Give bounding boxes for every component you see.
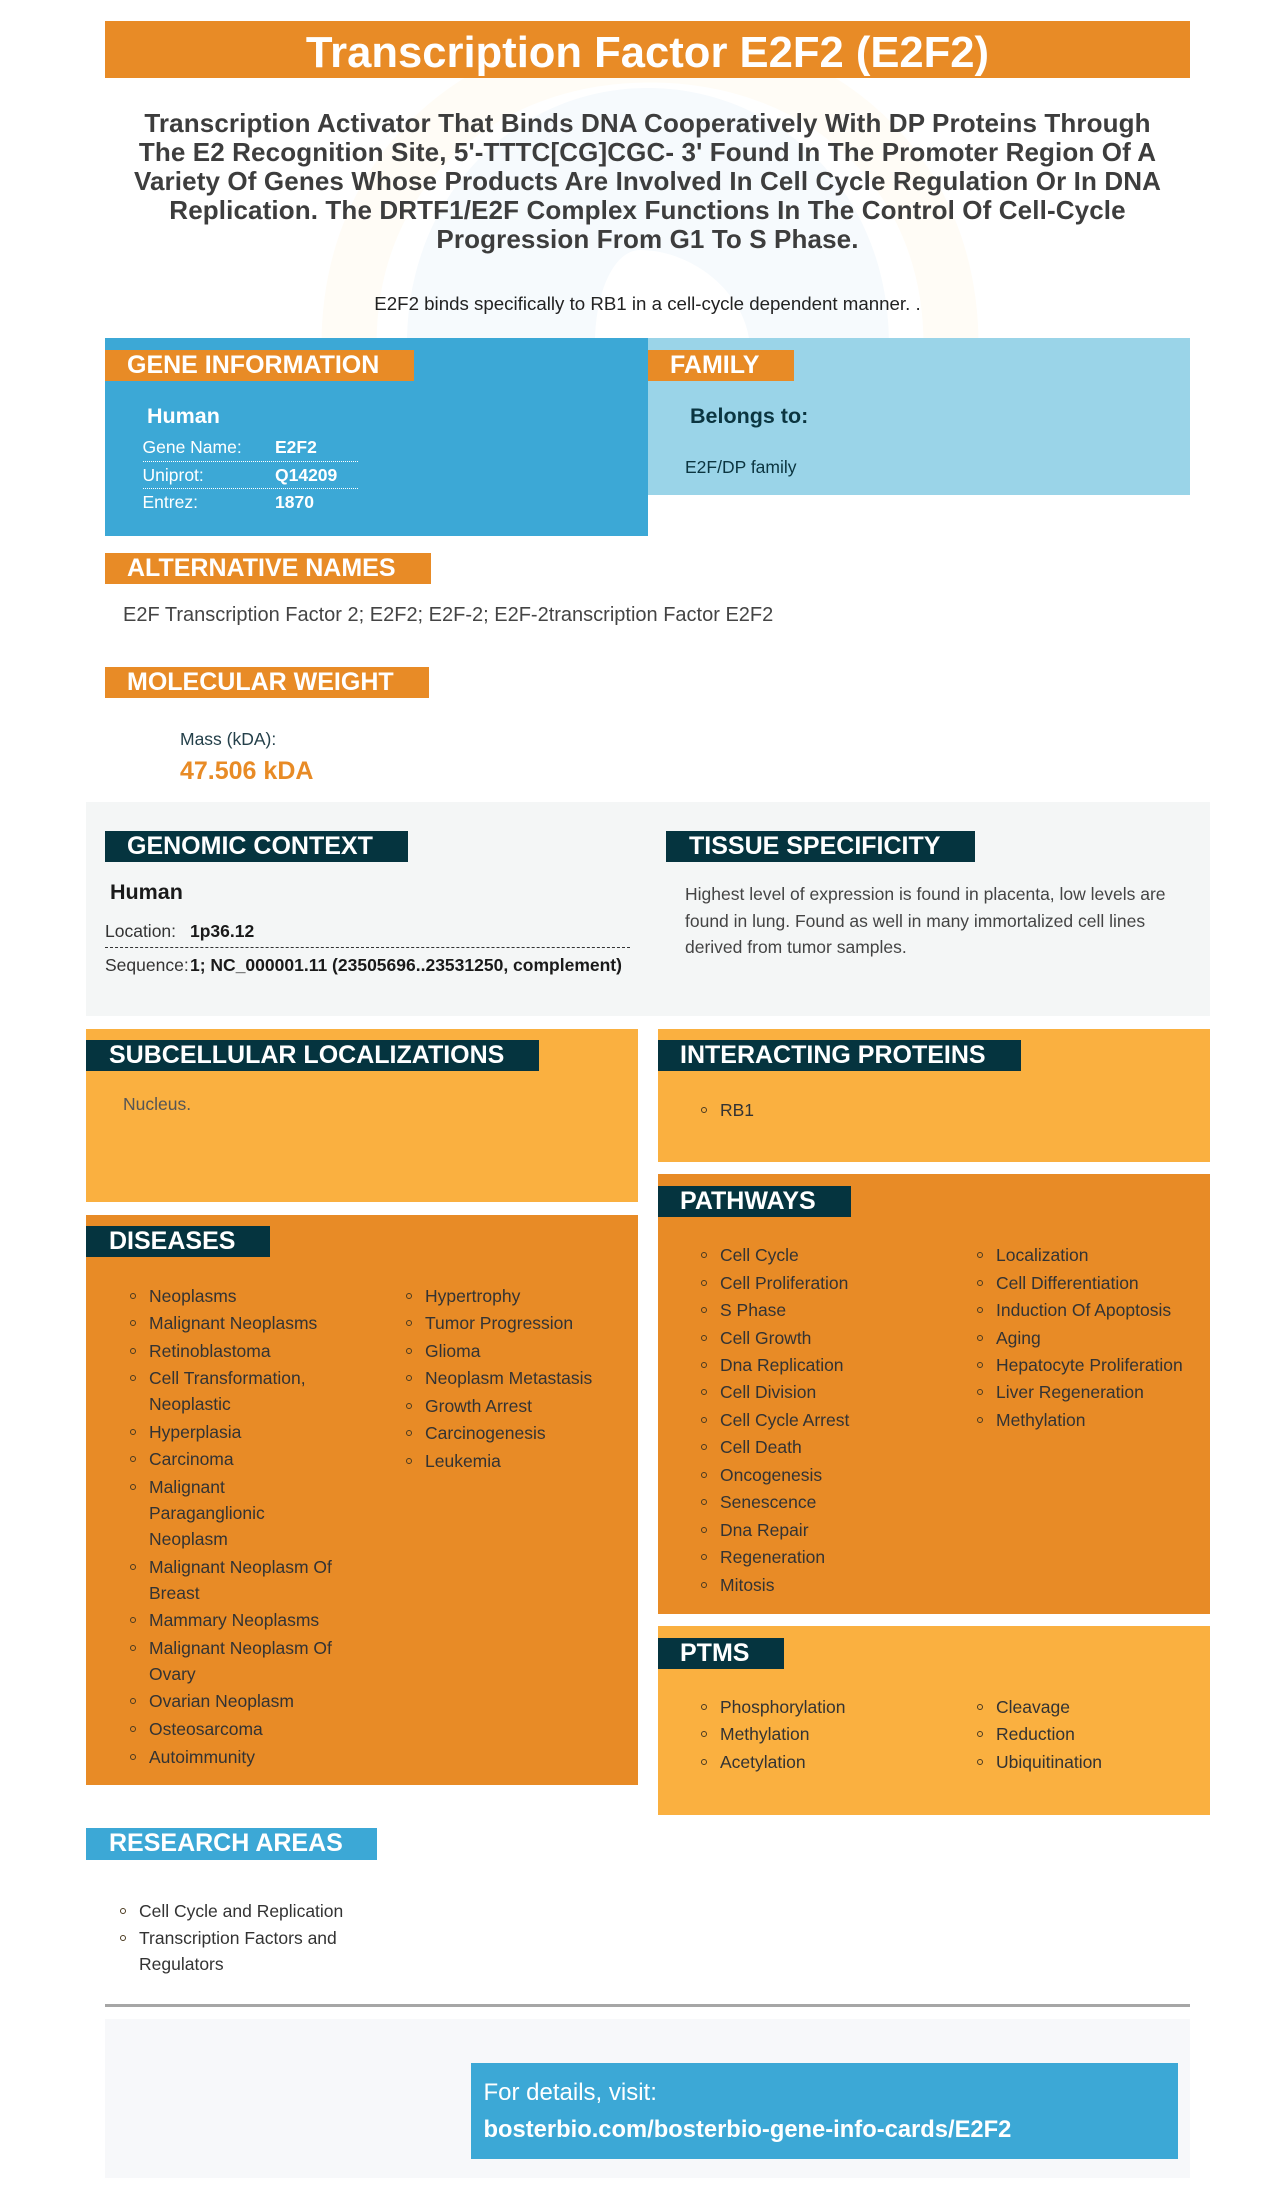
heading: genomic context: GENOMIC CONTEXT [127, 832, 373, 860]
tissue specificity text [685, 884, 1166, 957]
disease list column 2 [406, 1286, 592, 1471]
panel: gene information [105, 338, 648, 536]
disease list column 1: Neoplasm [149, 1529, 228, 1549]
panel: ptms [658, 1626, 1210, 1815]
research area list [120, 1900, 343, 1974]
heading: diseases [86, 1226, 270, 1257]
location row: Location: [105, 920, 176, 940]
pathway list column 1: S Phase [720, 1300, 786, 1320]
callout: details link [471, 2063, 1178, 2159]
title banner [105, 21, 1190, 78]
heading: ptms [658, 1638, 784, 1669]
tissue specificity text: Highest level of expression is found in placenta, low levels are [685, 884, 1166, 904]
heading: diseases: DISEASES [109, 1227, 235, 1255]
pathway list column 2: Methylation [996, 1410, 1086, 1430]
gene name row [142, 434, 358, 462]
disease list column 1: Paraganglionic [149, 1503, 265, 1523]
panel: genomic context and tissue specificity: 1; NC_000001.11 (23505696..23531250, complement) [190, 955, 622, 975]
ptm list column 2: Reduction [996, 1724, 1075, 1744]
heading: subcellular localizations: SUBCELLULAR LOCALIZATIONS [109, 1041, 504, 1069]
panel: research areas [86, 1828, 377, 1974]
entrez row [142, 492, 314, 512]
family name: E2F/DP family [685, 456, 797, 476]
localization text: Nucleus. [123, 1094, 191, 1114]
ptm list column 2: Ubiquitination [996, 1752, 1102, 1772]
protein list: RB1 [720, 1100, 754, 1120]
heading: family [648, 350, 794, 381]
disease list column 1: Cell Transformation, [149, 1368, 306, 1388]
panel: subcellular localizations [86, 1029, 638, 1202]
ptm list column 1: Phosphorylation [720, 1697, 846, 1717]
gene name row: Gene Name: [142, 436, 242, 456]
subtitle description: The E2 Recognition Site, 5'-TTTC[CG]CGC- 3' Found In The Promoter Region Of A [139, 137, 1156, 167]
disease list column 2: Carcinogenesis [425, 1423, 546, 1443]
disease list column 1: Breast [149, 1583, 200, 1603]
function note: E2F2 binds specifically to RB1 in a cell-cycle dependent manner. . [374, 293, 921, 314]
pathway list column 2: Cell Differentiation [996, 1273, 1139, 1293]
disease list column 2: Tumor Progression [425, 1313, 573, 1333]
mass value: 47.506 kDA [180, 757, 313, 785]
subtitle description: Progression From G1 To S Phase. [436, 224, 859, 254]
pathway list column 2: Liver Regeneration [996, 1382, 1144, 1402]
ptm list column 1: Acetylation [720, 1752, 806, 1772]
pathway list column 1: Cell Proliferation [720, 1273, 848, 1293]
panel: diseases [86, 1215, 638, 1785]
entrez row: 1870 [275, 492, 314, 512]
belongs to label: Belongs to: [690, 404, 808, 428]
heading: interacting proteins: INTERACTING PROTEINS [680, 1041, 986, 1069]
disease list column 1: Osteosarcoma [149, 1719, 263, 1739]
pathway list column 1: Cell Cycle Arrest [720, 1410, 849, 1430]
ptm list column 1 [701, 1697, 846, 1772]
disease list column 1: Malignant Neoplasms [149, 1313, 317, 1333]
pathway list column 1: Oncogenesis [720, 1465, 822, 1485]
pathway list column 1: Dna Repair [720, 1520, 809, 1540]
pathway list column 1: Cell Death [720, 1437, 802, 1457]
subtitle description [134, 108, 1161, 254]
disease list column 1: Malignant Neoplasm Of [149, 1638, 332, 1658]
species label: Human [147, 404, 220, 428]
heading: gene information: GENE INFORMATION [127, 351, 379, 379]
disease list column 1: Ovary [149, 1664, 196, 1684]
disease list column 1: Hyperplasia [149, 1422, 241, 1442]
background watermark [322, 78, 978, 338]
ptm list column 2 [977, 1697, 1102, 1772]
disease list column 1: Malignant Neoplasm Of [149, 1557, 332, 1577]
mass label: Mass (kDA): [180, 729, 276, 749]
disease list column 2: Glioma [425, 1341, 480, 1361]
heading: molecular weight: MOLECULAR WEIGHT [127, 668, 394, 696]
heading: ptms: PTMS [680, 1639, 749, 1667]
sequence row: Sequence: [105, 955, 189, 975]
details label: For details, visit: [484, 2079, 657, 2106]
pathway list column 2: Hepatocyte Proliferation [996, 1355, 1183, 1375]
tissue specificity text: found in lung. Found as well in many immortalized cell lines [685, 911, 1145, 931]
pathway list column 1 [701, 1245, 850, 1595]
details url: bosterbio.com/bosterbio-gene-info-cards/E2F2 [484, 2116, 1011, 2143]
disease list column 1: Carcinoma [149, 1449, 234, 1469]
pathway list column 1: Cell Cycle [720, 1245, 799, 1265]
heading: research areas: RESEARCH AREAS [109, 1829, 343, 1857]
alternative names text: E2F Transcription Factor 2; E2F2; E2F-2; E2F-2transcription Factor E2F2 [123, 604, 773, 626]
heading: tissue specificity: TISSUE SPECIFICITY [689, 832, 940, 860]
pathway list column 1: Regeneration [720, 1547, 825, 1567]
panel: footer [105, 2019, 1190, 2178]
pathway list column 2: Induction Of Apoptosis [996, 1300, 1171, 1320]
disease list column 1: Retinoblastoma [149, 1341, 271, 1361]
disease list column 1: Neoplasms [149, 1286, 237, 1306]
entrez row: Entrez: [142, 492, 198, 512]
uniprot row [142, 462, 358, 489]
footer rule [105, 2004, 1190, 2007]
heading: family: FAMILY [670, 351, 759, 379]
subtitle description: Variety Of Genes Whose Products Are Involved In Cell Cycle Regulation Or In DNA [134, 166, 1161, 196]
disease list column 2: Neoplasm Metastasis [425, 1368, 592, 1388]
panel: interacting proteins [658, 1029, 1210, 1162]
research area list: Regulators [139, 1954, 224, 1974]
pathway list column 1: Dna Replication [720, 1355, 844, 1375]
subtitle description: Replication. The DRTF1/E2F Complex Functions In The Control Of Cell-Cycle [169, 195, 1126, 225]
pathway list column 1: Cell Growth [720, 1328, 811, 1348]
ptm list column 2: Cleavage [996, 1697, 1070, 1717]
gene name row: E2F2 [275, 436, 317, 456]
disease list column 1 [130, 1286, 332, 1767]
location row [105, 918, 630, 948]
disease list column 2: Hypertrophy [425, 1286, 520, 1306]
uniprot row: Uniprot: [142, 465, 204, 485]
disease list column 1: Autoimmunity [149, 1747, 255, 1767]
disease list column 1: Neoplastic [149, 1394, 231, 1414]
heading: pathways: PATHWAYS [680, 1187, 816, 1215]
heading: alternative names: ALTERNATIVE NAMES [127, 554, 396, 582]
disease list column 1: Mammary Neoplasms [149, 1610, 319, 1630]
panel: genomic context and tissue specificity [86, 802, 1210, 1016]
ptm list column 1: Methylation [720, 1724, 810, 1744]
pathway list column 1: Cell Division [720, 1382, 816, 1402]
disease list column 1: Ovarian Neoplasm [149, 1691, 294, 1711]
disease list column 2: Leukemia [425, 1451, 501, 1471]
pathway list column 2: Localization [996, 1245, 1088, 1265]
disease list column 1: Malignant [149, 1477, 225, 1497]
pathway list column 1: Mitosis [720, 1575, 774, 1595]
uniprot row: Q14209 [275, 465, 337, 485]
pathway list column 2 [977, 1245, 1183, 1430]
sequence row [105, 955, 622, 975]
species label: Human [110, 880, 183, 904]
disease list column 2: Growth Arrest [425, 1396, 532, 1416]
research area list: Transcription Factors and [139, 1928, 337, 1948]
panel: family [648, 338, 1190, 495]
title banner: Transcription Factor E2F2 (E2F2) [306, 29, 989, 77]
tissue specificity text: derived from tumor samples. [685, 937, 907, 957]
research area list: Cell Cycle and Replication [139, 1900, 343, 1920]
pathway list column 1: Senescence [720, 1492, 816, 1512]
pathway list column 2: Aging [996, 1328, 1041, 1348]
heading: pathways [658, 1186, 851, 1217]
location row: 1p36.12 [190, 920, 254, 940]
subtitle description: Transcription Activator That Binds DNA Cooperatively With DP Proteins Through [144, 108, 1151, 138]
panel: pathways [658, 1174, 1210, 1614]
